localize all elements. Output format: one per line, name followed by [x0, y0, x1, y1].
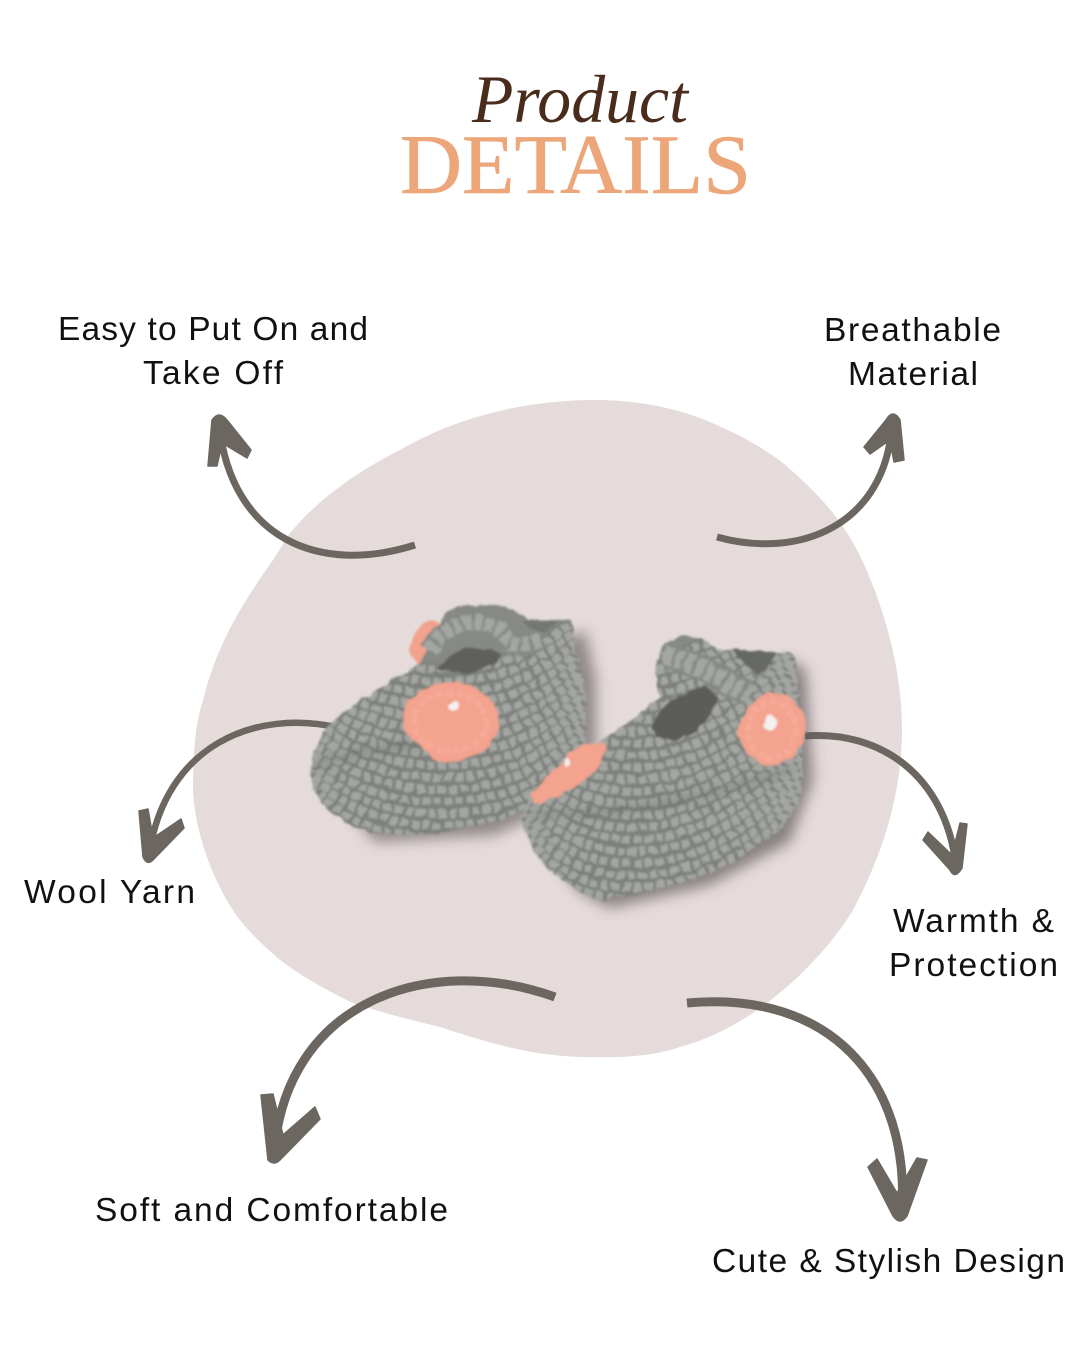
- label: wool yarn: Wool Yarn: [24, 874, 195, 911]
- label: breathable material: Material: [848, 356, 978, 393]
- pearl: left shoe: [450, 702, 458, 710]
- arrow: easy to put on: [208, 415, 415, 555]
- label: easy to put on: [58, 311, 368, 392]
- right shoe strap: [665, 655, 750, 695]
- arrow: cute and stylish: [687, 1002, 927, 1221]
- label: breathable material: Breathable: [824, 312, 1001, 349]
- arrow: soft and comfortable: [261, 981, 555, 1163]
- title line: Product: Product: [471, 61, 690, 137]
- label: breathable material: [824, 312, 1001, 393]
- flower behind left shoe strap: [404, 616, 446, 668]
- label: warmth and protection: [889, 903, 1058, 984]
- right shoe knit body: [520, 634, 804, 902]
- arrow: wool yarn: [139, 723, 340, 862]
- right shoe side flower: [739, 693, 806, 767]
- label: soft and comfortable: Soft and Comfortable: [95, 1192, 448, 1229]
- right shoe toe flower: [530, 742, 606, 802]
- label: warmth and protection: Warmth &: [893, 903, 1054, 940]
- left shoe openings: [438, 648, 502, 673]
- label: cute and stylish design: Cute & Stylish Design: [712, 1243, 1065, 1280]
- shadow: right shoe: [535, 660, 813, 908]
- arrow: breathable: [717, 414, 904, 544]
- label: easy to put on: Easy to Put On and: [58, 311, 368, 348]
- left shoe knit body: [309, 604, 586, 836]
- left shoe strap: [430, 622, 540, 650]
- right shoe: [520, 634, 808, 902]
- arrow: warmth and protection: [805, 735, 967, 875]
- shadow: left shoe: [322, 630, 596, 842]
- pearl: right shoe side: [764, 716, 778, 730]
- product photo: crochet baby shoes: [309, 604, 822, 916]
- title: [400, 61, 751, 212]
- label: easy to put on: Take Off: [143, 355, 284, 392]
- left shoe flower: [403, 682, 498, 761]
- background blob: [193, 400, 902, 1057]
- left shoe: [309, 604, 586, 836]
- left shoe sole ridge: [312, 745, 420, 766]
- pearl: right shoe toe: [562, 760, 570, 766]
- label: warmth and protection: Protection: [889, 947, 1058, 984]
- title line: DETAILS: DETAILS: [400, 118, 751, 212]
- right shoe sole ridge: [530, 770, 790, 815]
- right shoe openings: [653, 687, 717, 741]
